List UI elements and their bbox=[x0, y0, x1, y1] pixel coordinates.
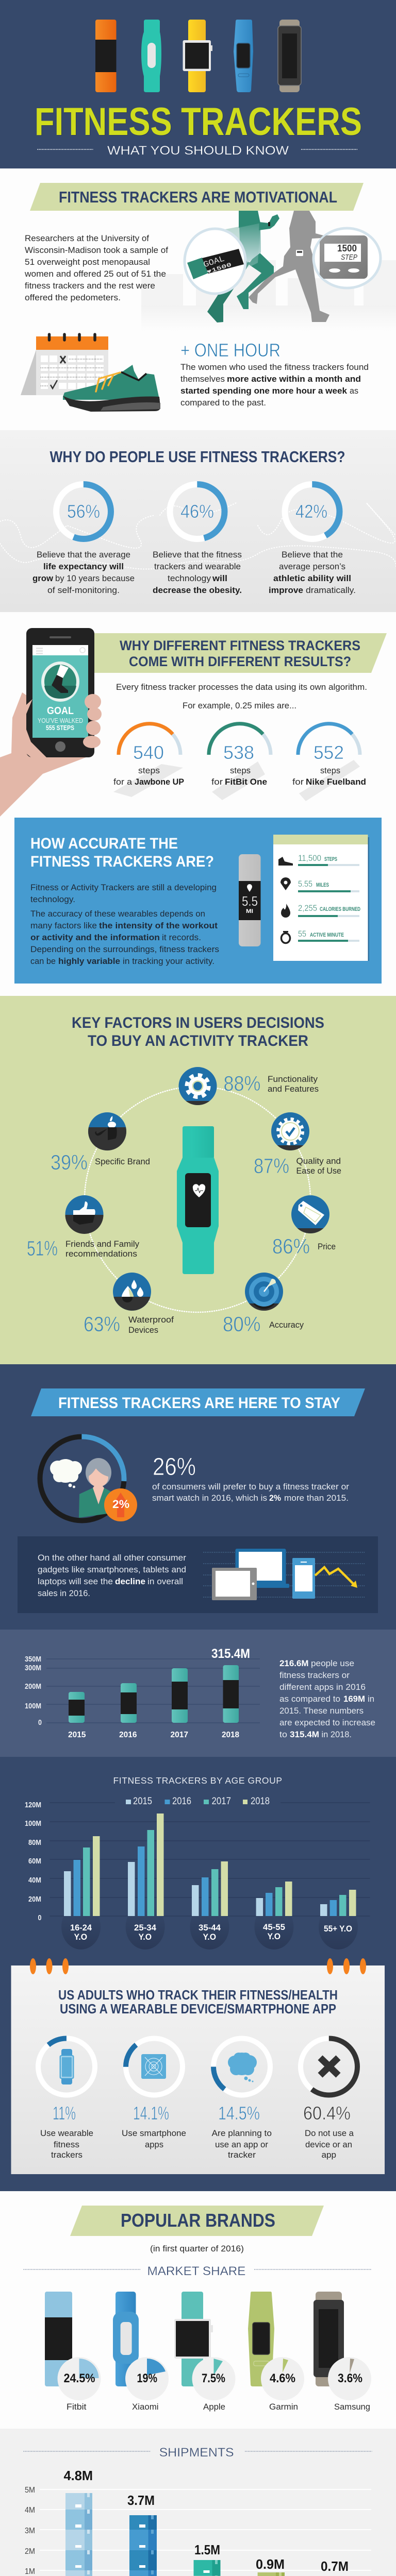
panel: key factors bbox=[0, 996, 396, 1364]
stat: 60.4% do not use: Do not use a bbox=[305, 2129, 354, 2138]
panel: popular brands bbox=[0, 2191, 396, 2429]
text block: consumers: of consumers will prefer to buy a fitness tracker or bbox=[152, 1482, 350, 1492]
brand: Samsung: 3.6% bbox=[338, 2371, 362, 2385]
panel: different results bbox=[0, 612, 396, 996]
factor: specific brand: 39% bbox=[51, 1150, 88, 1174]
heading: HOW ACCURATE THE bbox=[30, 835, 178, 852]
heading: FITNESS TRACKERS ARE? bbox=[30, 853, 214, 870]
stat: 26%: 26% bbox=[153, 1453, 196, 1481]
y axis labels: 0 bbox=[38, 1913, 41, 1922]
text block: 216.6M: as compared to bbox=[279, 1694, 340, 1704]
icon: phone bbox=[292, 1558, 315, 1599]
y axis labels: 40M bbox=[28, 1876, 41, 1885]
bar 2017 bbox=[170, 1668, 188, 1739]
group 45-55: 45-55 bbox=[263, 1922, 285, 1932]
subtitle: WHAT YOU SHOULD KNOW bbox=[107, 144, 289, 158]
text block: accuracy: the intensity of the workout bbox=[99, 921, 218, 930]
text block: obesity: technology bbox=[168, 574, 211, 583]
text block: researchers bbox=[24, 234, 168, 302]
text block: one hour description: themselves bbox=[180, 375, 225, 384]
text block: life expectancy: by 10 years because bbox=[55, 574, 135, 583]
factor: functionality bbox=[178, 1067, 319, 1105]
text block: obesity: will bbox=[212, 574, 227, 583]
icon: band display: MI bbox=[246, 908, 253, 914]
bar: Apple boxes bbox=[194, 2542, 221, 2576]
factor: accuracy: Accuracy bbox=[269, 1320, 304, 1330]
text block: 216.6M: in bbox=[368, 1694, 374, 1704]
icon: teal tracker bbox=[141, 20, 161, 92]
stat: 14.5% planning: use an app or bbox=[215, 2140, 269, 2149]
icon: yellow watch bbox=[183, 20, 212, 92]
text: algorithm: Every fitness tracker processes the data using its own algorithm. bbox=[116, 683, 367, 692]
factor: waterproof bbox=[84, 1273, 174, 1336]
panel: here to stay bbox=[0, 1364, 396, 2191]
row: miles: 5.55 bbox=[298, 879, 312, 889]
row: calories bbox=[281, 903, 360, 918]
stat: plus one hour: + ONE HOUR bbox=[180, 340, 280, 361]
callout: pedometer: 1500 bbox=[337, 243, 357, 253]
axis labels: 200M bbox=[25, 1682, 41, 1691]
stat: 11% wearable trackers: fitness bbox=[54, 2140, 79, 2149]
factor: quality bbox=[254, 1112, 341, 1178]
y axis labels: 2M bbox=[25, 2547, 35, 2556]
gauge: Jawbone UP: Jawbone UP bbox=[135, 777, 184, 787]
icon: blue tracker bbox=[234, 20, 253, 92]
brand: Garmin bbox=[248, 2292, 304, 2412]
row: steps: 11,500 bbox=[298, 853, 321, 863]
heading banner: FITNESS TRACKERS ARE HERE TO STAY bbox=[58, 1395, 340, 1412]
text block: researchers: Researchers at the University of bbox=[25, 234, 149, 243]
heading banner bbox=[30, 183, 364, 211]
gauge: Nike Fuelband: 552 bbox=[314, 742, 344, 763]
icon: grey tracker bbox=[278, 20, 301, 92]
heading bbox=[30, 835, 214, 870]
factor: quality: Quality and bbox=[296, 1157, 341, 1166]
text block: life expectancy: of self-monitoring. bbox=[47, 586, 120, 595]
bar: Fitbit boxes bbox=[64, 2468, 93, 2576]
text block: 216.6M: are expected to increase bbox=[279, 1718, 375, 1727]
row: active minute bbox=[282, 929, 359, 943]
text block: athletic ability: improve bbox=[269, 586, 303, 595]
heading banner bbox=[70, 2206, 324, 2236]
y axis labels: 5M bbox=[25, 2486, 35, 2495]
illustration: hand holding phone bbox=[0, 628, 102, 817]
bar 2015 bbox=[68, 1692, 86, 1739]
heading banner: FITNESS TRACKERS ARE MOTIVATIONAL bbox=[59, 189, 337, 206]
panel: how accurate bbox=[14, 818, 382, 984]
callout: wrist band goal: GOAL bbox=[202, 254, 226, 269]
text block: life expectancy: life expectancy will bbox=[43, 562, 124, 571]
icon: calendar bbox=[21, 334, 108, 395]
y axis labels: 60M bbox=[28, 1857, 41, 1866]
callout: wrist band goal: ♥1500 bbox=[206, 262, 233, 276]
text block: accuracy: Fitness or Activity Trackers are still a developing bbox=[30, 883, 217, 892]
panel: US adults notebook bbox=[11, 1958, 385, 2174]
illustration: grey runner bbox=[249, 211, 329, 322]
icon: teal band centre bbox=[177, 1126, 219, 1274]
icon: laptop bbox=[235, 1549, 289, 1588]
brand: Apple bbox=[174, 2292, 235, 2412]
group 35-44: Y.O bbox=[203, 1932, 216, 1942]
text block: athletic ability: athletic ability will bbox=[273, 574, 351, 583]
heading: US ADULTS WHO TRACK THEIR FITNESS/HEALTH bbox=[58, 1987, 338, 2003]
factor: specific brand: Specific Brand bbox=[95, 1157, 150, 1166]
donut: 46% bbox=[170, 484, 225, 539]
axis labels: 0 bbox=[38, 1718, 42, 1727]
panel: activity card bbox=[273, 835, 369, 961]
illustration: woman thinking with ring bbox=[40, 1436, 137, 1521]
y axis labels: 3M bbox=[25, 2527, 35, 2535]
text block: obesity: Believe that the fitness bbox=[153, 550, 242, 560]
group 16-24: Y.O bbox=[74, 1932, 87, 1942]
text block: obesity bbox=[153, 550, 242, 595]
text block: decline: On the other hand all other consumer bbox=[38, 1553, 187, 1563]
factor: functionality: Functionality bbox=[268, 1075, 318, 1084]
text block: 216.6M: in 2018. bbox=[322, 1730, 352, 1739]
illustration: hand holding phone: 555 STEPS bbox=[46, 724, 74, 732]
heading banner: COME WITH DIFFERENT RESULTS? bbox=[129, 654, 351, 669]
text: example: For example, 0.25 miles are... bbox=[183, 701, 296, 710]
axis labels: 350M bbox=[25, 1655, 41, 1664]
stat: 14.5% planning: tracker bbox=[228, 2150, 256, 2160]
heading banner bbox=[31, 1388, 365, 1416]
stat: 60.4% do not use: app bbox=[322, 2150, 336, 2160]
bar 2016 bbox=[119, 1683, 137, 1739]
gauge: Nike Fuelband: Nike Fuelband bbox=[306, 777, 366, 787]
text block: life expectancy: Believe that the average bbox=[37, 550, 130, 560]
donut: 42% bbox=[285, 484, 339, 539]
gauge: Jawbone UP: 540 bbox=[133, 742, 164, 763]
bar: Apple boxes: 1.5M bbox=[194, 2542, 220, 2557]
panel: users chart bbox=[0, 1630, 396, 1757]
bar 2018: 2018 bbox=[222, 1731, 239, 1739]
stat: 14.1% smartphone apps: 14.1% bbox=[133, 2103, 169, 2124]
text block: obesity: decrease the obesity. bbox=[153, 586, 242, 595]
factor: quality: Ease of Use bbox=[296, 1166, 341, 1176]
stat: 14.5% planning bbox=[202, 2027, 282, 2160]
brand: Apple: 7.5% bbox=[202, 2371, 225, 2385]
arrow: decline bbox=[315, 1567, 357, 1588]
text block: 216.6M bbox=[279, 1659, 375, 1739]
legend: 2016 bbox=[172, 1796, 191, 1807]
heading bbox=[58, 1987, 338, 2016]
y axis labels bbox=[25, 2486, 35, 2576]
factor: functionality: and Features bbox=[268, 1084, 319, 1094]
text block: 216.6M: to bbox=[279, 1730, 287, 1739]
text block: 216.6M: different apps in 2016 bbox=[279, 1683, 366, 1692]
illustration: hand holding phone: GOAL bbox=[47, 705, 74, 717]
gauge: FitBit One: steps bbox=[230, 766, 251, 775]
text block: one hour description bbox=[180, 363, 369, 408]
gauge: FitBit One: 538 bbox=[223, 742, 254, 763]
brand: Fitbit: Fitbit bbox=[67, 2402, 87, 2412]
brand: Samsung: Samsung bbox=[334, 2402, 370, 2412]
row: miles: MILES bbox=[316, 882, 329, 888]
y axis labels bbox=[25, 1801, 41, 1922]
stat: 11% wearable trackers: Use wearable bbox=[40, 2129, 93, 2138]
text block: decline: laptops will see the bbox=[38, 1577, 113, 1586]
factor: price bbox=[272, 1195, 336, 1258]
factor: accuracy: 80% bbox=[223, 1312, 261, 1336]
row: miles bbox=[280, 877, 359, 892]
y axis labels: 20M bbox=[28, 1895, 41, 1904]
donut: 42%: 42% bbox=[295, 501, 327, 522]
text block: accuracy: or activity and the information bbox=[30, 933, 160, 942]
text block: researchers: offered the pedometers. bbox=[25, 293, 121, 302]
stat: 14.5% planning: 14.5% bbox=[218, 2103, 260, 2124]
brand: Apple: Apple bbox=[203, 2402, 225, 2412]
stat: 60.4% do not use: 60.4% bbox=[303, 2103, 351, 2124]
panel: decline in gadgets bbox=[18, 1536, 378, 1613]
legend bbox=[126, 1796, 270, 1807]
factor: waterproof: Waterproof bbox=[128, 1315, 174, 1325]
gauge: Jawbone UP bbox=[113, 724, 184, 787]
row: calories: CALORIES BURNED bbox=[320, 906, 360, 912]
subheading: (in first quarter of 2016) bbox=[150, 2244, 244, 2253]
group 16-24 bbox=[61, 1836, 101, 1950]
row: active minute: ACTIVE MINUTE bbox=[310, 932, 344, 938]
group 25-34: 25-34 bbox=[134, 1923, 157, 1933]
illustration: teal runner bbox=[199, 211, 279, 323]
bar 2018 bbox=[211, 1647, 250, 1739]
text block: athletic ability: average person’s bbox=[279, 562, 345, 571]
text block: life expectancy: grow bbox=[32, 574, 53, 583]
text block: one hour description: as bbox=[350, 386, 358, 396]
stat: 11% wearable trackers: trackers bbox=[51, 2150, 82, 2160]
chart: trackers by age group bbox=[25, 1775, 370, 1950]
gauge: FitBit One: FitBit One bbox=[225, 777, 267, 787]
stat: 14.5% planning: Are planning to bbox=[211, 2129, 272, 2138]
group 25-34 bbox=[126, 1814, 165, 1950]
factor: friends and family bbox=[27, 1195, 140, 1260]
icon: running shoe bbox=[63, 365, 160, 412]
brand: Xiaomi: Xiaomi bbox=[132, 2402, 159, 2412]
bar: Xiaomi boxes bbox=[127, 2493, 157, 2576]
stat: 11% wearable trackers bbox=[27, 2027, 106, 2160]
group 45-55: Y.O bbox=[267, 1931, 280, 1941]
row: calories: 2,255 bbox=[298, 903, 317, 913]
notebook rings bbox=[30, 1958, 366, 1974]
icon: orange tracker bbox=[95, 20, 117, 92]
text block: athletic ability: dramatically. bbox=[306, 586, 356, 595]
factor: accuracy bbox=[223, 1273, 304, 1336]
badge: 2% up: 2% bbox=[112, 1498, 129, 1511]
factor: friends and family: Friends and Family bbox=[65, 1240, 140, 1249]
text block: accuracy: technology. bbox=[30, 895, 75, 904]
gauge: Jawbone UP: for a bbox=[113, 777, 133, 787]
text block: obesity: trackers and wearable bbox=[154, 562, 241, 571]
stat: 14.1% smartphone apps bbox=[122, 2038, 186, 2149]
bar: Xiaomi boxes: 3.7M bbox=[127, 2493, 155, 2508]
row: steps: STEPS bbox=[324, 856, 337, 862]
axis labels: 100M bbox=[25, 1702, 41, 1710]
text block: accuracy bbox=[30, 883, 219, 966]
y axis labels: 120M bbox=[25, 1801, 41, 1809]
text block: accuracy: can be bbox=[30, 957, 56, 966]
illustration: hand holding phone: YOU'VE WALKED bbox=[38, 717, 83, 724]
stat: 11% wearable trackers: 11% bbox=[53, 2103, 76, 2124]
bar 2015: 2015 bbox=[68, 1731, 86, 1739]
section title: SHIPMENTS bbox=[159, 2446, 234, 2460]
text block: accuracy: many factors like bbox=[30, 921, 97, 930]
factor: waterproof: 63% bbox=[84, 1312, 120, 1336]
factor: functionality: 88% bbox=[224, 1072, 261, 1095]
factor: price: 86% bbox=[272, 1234, 310, 1258]
legend: 2015 bbox=[133, 1796, 152, 1807]
text block: decline: in overall bbox=[147, 1577, 183, 1586]
gauge: Nike Fuelband bbox=[292, 724, 366, 787]
group 55+ bbox=[319, 1890, 358, 1950]
stat: 60.4% do not use bbox=[301, 2038, 357, 2160]
text block: decline: gadgets like smartphones, tablets and bbox=[38, 1565, 186, 1574]
text block: 216.6M: 2015. These numbers bbox=[279, 1706, 364, 1716]
donut: 56% bbox=[56, 484, 111, 539]
axis labels bbox=[25, 1655, 42, 1727]
factor: friends and family: recommendations bbox=[65, 1249, 137, 1259]
text block: 216.6M: 315.4M bbox=[290, 1730, 319, 1739]
text block: consumers bbox=[152, 1482, 350, 1503]
brand: Xiaomi bbox=[113, 2292, 169, 2412]
panel: shipments bbox=[0, 2429, 396, 2576]
heading bbox=[72, 1014, 324, 1049]
legend: 2017 bbox=[211, 1796, 231, 1807]
group 35-44: 35-44 bbox=[199, 1923, 221, 1933]
section title: market share: MARKET SHARE bbox=[147, 2264, 245, 2278]
bar 2017: 2017 bbox=[170, 1731, 188, 1739]
text block: one hour description: The women who used the fitness trackers found bbox=[180, 363, 369, 372]
text block: accuracy: Depending on the surroundings, fitness trackers bbox=[30, 945, 219, 954]
text block: 216.6M: 216.6M bbox=[279, 1659, 308, 1668]
text block: athletic ability: Believe that the bbox=[282, 550, 343, 560]
donut: 46%: 46% bbox=[180, 501, 214, 522]
heading: USING A WEARABLE DEVICE/SMARTPHONE APP bbox=[60, 2001, 336, 2016]
text block: one hour description: compared to the past. bbox=[180, 398, 266, 408]
callout: pedometer: STEP bbox=[341, 253, 357, 262]
stat: 60.4% do not use: device or an bbox=[305, 2140, 352, 2149]
chart silhouette background bbox=[141, 260, 396, 331]
heading: WHY DO PEOPLE USE FITNESS TRACKERS? bbox=[50, 448, 345, 466]
text block: decline: decline bbox=[115, 1577, 145, 1586]
panel: header bbox=[0, 0, 396, 168]
bar 2018: 315.4M bbox=[211, 1647, 250, 1661]
brand: Garmin: Garmin bbox=[269, 2402, 298, 2412]
chart title: FITNESS TRACKERS BY AGE GROUP bbox=[113, 1775, 282, 1786]
text block: 216.6M: people use bbox=[311, 1659, 354, 1668]
y axis labels: 100M bbox=[25, 1819, 41, 1828]
gauge: Jawbone UP: steps bbox=[138, 766, 160, 775]
axis labels: 300M bbox=[25, 1664, 41, 1672]
y axis labels: 4M bbox=[25, 2506, 35, 2515]
text block: accuracy: The accuracy of these wearables depends on bbox=[30, 909, 205, 919]
stat: 14.1% smartphone apps: Use smartphone bbox=[122, 2129, 186, 2138]
heading: TO BUY AN ACTIVITY TRACKER bbox=[88, 1032, 308, 1049]
badge: 2% up bbox=[104, 1488, 137, 1521]
brand: Xiaomi: 19% bbox=[137, 2371, 157, 2385]
icon: tablet bbox=[212, 1568, 257, 1600]
text block: consumers: more than 2015. bbox=[284, 1494, 349, 1503]
heading: KEY FACTORS IN USERS DECISIONS bbox=[72, 1014, 324, 1031]
text block: decline: sales in 2016. bbox=[38, 1589, 90, 1598]
factor: specific brand bbox=[51, 1112, 150, 1174]
brand: Fitbit: 24.5% bbox=[64, 2371, 95, 2385]
heading banner bbox=[94, 633, 387, 673]
y axis labels: 80M bbox=[28, 1838, 41, 1847]
text block: researchers: 51 overweight post menopausal bbox=[25, 258, 150, 267]
text block: consumers: 2% bbox=[269, 1494, 281, 1503]
stat: 14.1% smartphone apps: apps bbox=[145, 2140, 163, 2149]
group 35-44 bbox=[190, 1861, 229, 1950]
factor: price: Price bbox=[318, 1242, 336, 1251]
text block: athletic ability bbox=[269, 550, 356, 595]
bar: Samsung box: 0.7M bbox=[321, 2558, 349, 2574]
text block: researchers: women and offered 25 out of 51 the bbox=[24, 269, 166, 279]
gauge: FitBit One bbox=[209, 724, 271, 787]
bar 2016: 2016 bbox=[119, 1731, 137, 1739]
bar: Fitbit boxes: 4.8M bbox=[64, 2468, 93, 2483]
bar: Garmin box: 0.9M bbox=[256, 2556, 285, 2572]
watermark bands bbox=[113, 760, 360, 801]
text block: one hour description: more active within a month and bbox=[227, 375, 361, 384]
legend: 2018 bbox=[251, 1796, 270, 1807]
text block: 216.6M: 169M bbox=[343, 1694, 365, 1704]
callout: wrist band goal bbox=[185, 229, 245, 294]
group 45-55 bbox=[254, 1882, 293, 1950]
text block: accuracy: in tracking your activity. bbox=[123, 957, 214, 966]
callout: pedometer bbox=[314, 228, 381, 288]
text block: researchers: Wisconsin-Madison took a sample of bbox=[25, 246, 168, 255]
panel: why people use trackers bbox=[0, 430, 396, 612]
factor: friends and family: 51% bbox=[27, 1236, 58, 1260]
donut: 56%: 56% bbox=[67, 501, 100, 522]
text block: one hour description: started spending one more hour a week bbox=[180, 386, 348, 396]
gauge: FitBit One: for bbox=[211, 777, 223, 787]
text block: life expectancy bbox=[32, 550, 135, 595]
text block: accuracy: it records. bbox=[162, 933, 201, 942]
panel: motivational bbox=[21, 183, 396, 412]
heading banner: WHY DIFFERENT FITNESS TRACKERS bbox=[120, 638, 360, 653]
brand: Samsung bbox=[314, 2292, 371, 2412]
group 55+: 55+ Y.O bbox=[324, 1924, 352, 1934]
text block: consumers: smart watch in 2016, which is bbox=[152, 1494, 267, 1503]
group 25-34: Y.O bbox=[138, 1932, 152, 1942]
row: steps bbox=[278, 853, 359, 866]
text block: decline bbox=[38, 1553, 187, 1598]
gauge: Nike Fuelband: for bbox=[292, 777, 304, 787]
text block: researchers: fitness trackers and the rest were bbox=[25, 281, 155, 291]
y axis labels: 1M bbox=[25, 2567, 35, 2576]
brand: Fitbit bbox=[45, 2292, 101, 2412]
factor: quality: 87% bbox=[254, 1154, 289, 1178]
factor: waterproof: Devices bbox=[128, 1326, 158, 1335]
row: active minute: 55 bbox=[298, 929, 306, 939]
text block: 216.6M: fitness trackers or bbox=[279, 1671, 350, 1680]
text block: accuracy: highly variable bbox=[58, 957, 120, 966]
gauge: Nike Fuelband: steps bbox=[320, 766, 340, 775]
icon: band display: 5.5 bbox=[242, 893, 258, 909]
heading banner: POPULAR BRANDS bbox=[121, 2210, 275, 2231]
icon: band display bbox=[239, 854, 261, 946]
group 16-24: 16-24 bbox=[70, 1923, 92, 1933]
brand: Garmin: 4.6% bbox=[270, 2371, 295, 2385]
